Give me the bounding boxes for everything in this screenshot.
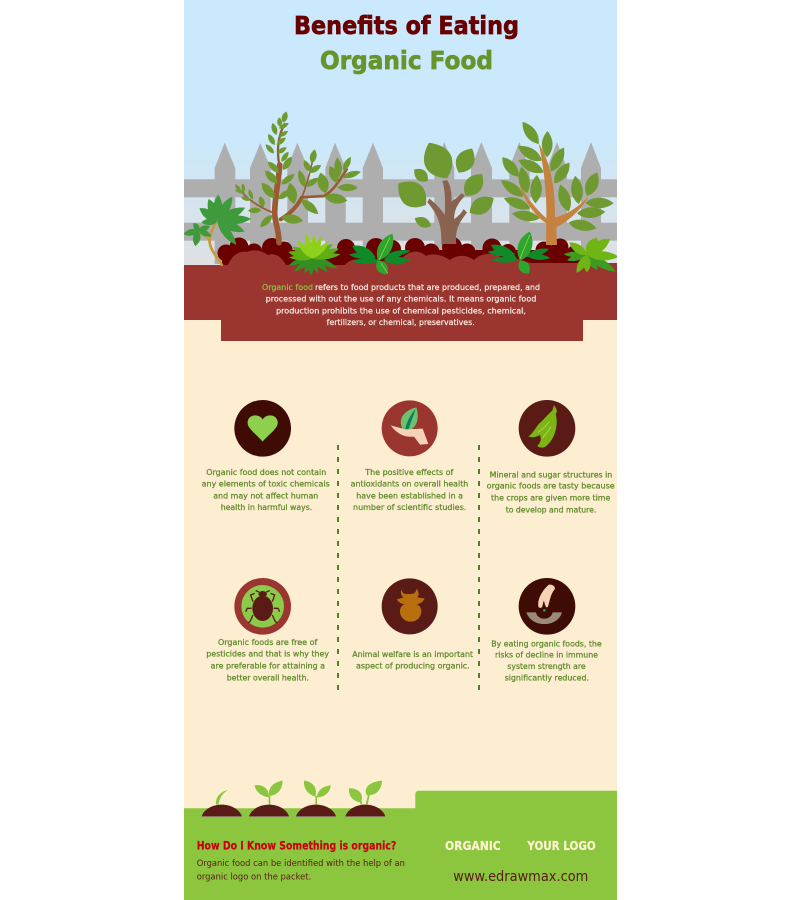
text: animal welfare: aspect of producing organic.: [356, 662, 470, 671]
text: toxic chemicals: health in harmful ways.: [221, 503, 312, 512]
text: antioxidants: number of scientific studies.: [353, 503, 466, 512]
palm plants at left: [183, 194, 252, 266]
text: pesticides: [206, 638, 329, 682]
text: immune system: By eating organic foods, the: [491, 639, 602, 648]
title: Organic Food: [320, 46, 493, 75]
fence: [184, 142, 617, 264]
text: animal welfare: [352, 650, 473, 671]
footer answer text: organic logo on the packet.: [197, 871, 311, 881]
fern plant: [564, 238, 617, 273]
intro paragraph: production prohibits the use of chemical pesticides, chemical,: [276, 306, 526, 315]
icon: hand planting seed: [519, 578, 575, 635]
icon: pea pod: [519, 400, 575, 457]
text: minerals and sugar: the crops are given more time: [491, 494, 610, 503]
intro paragraph: refers to food products that are produced, prepared, and: [315, 283, 540, 292]
icon: heart: [234, 400, 291, 457]
text: pesticides: are preferable for attaining a: [211, 662, 325, 671]
logo label: organic: ORGANIC: [445, 839, 501, 853]
title: Benefits of Eating: [294, 11, 519, 40]
dark soil mounds: [218, 238, 581, 265]
dashed dividers: [337, 445, 480, 690]
sky background: [184, 0, 617, 270]
text: pesticides: better overall health.: [227, 673, 309, 682]
intro paragraph: fertilizers, or chemical, preservatives.: [327, 318, 475, 327]
icon: hand holding leaf: [382, 400, 438, 456]
text: minerals and sugar: to develop and mature.: [506, 505, 596, 514]
text: toxic chemicals: Organic food does not contain: [206, 468, 326, 477]
red soil panel: [184, 250, 617, 341]
tree 2 with big leaves: [398, 142, 494, 244]
text: minerals and sugar: Mineral and sugar structures in: [490, 471, 612, 480]
tree 3 with orange trunk: [498, 119, 614, 245]
footer answer text: Organic food can be identified with the help of an: [197, 858, 405, 868]
grass bush: [287, 232, 341, 276]
footer question heading: How Do I Know Something is organic?: [197, 838, 396, 852]
text: toxic chemicals: any elements of toxic chemicals: [202, 480, 330, 489]
tree 1 with branching leaves: [234, 111, 362, 243]
title: [294, 11, 519, 75]
text: immune system: system strength are: [507, 662, 586, 671]
text: antioxidants: [351, 468, 468, 512]
text: antioxidants: antioxidants on overall health: [351, 480, 468, 489]
text: immune system: [491, 639, 602, 683]
intro paragraph: processed with out the use of any chemicals. It means organic food: [266, 294, 536, 304]
text: immune system: risks of decline in immune: [495, 650, 598, 659]
text: immune system: significantly reduced.: [505, 674, 589, 683]
cream background: [184, 320, 617, 820]
footer answer text: [197, 858, 405, 881]
text: antioxidants: have been established in a: [356, 492, 463, 500]
text: antioxidants: The positive effects of: [364, 468, 454, 477]
icon: bug: [234, 578, 291, 635]
seedlings: [202, 781, 385, 818]
broad-leaf plant 1: [349, 234, 406, 274]
intro paragraph: Organic food: [262, 283, 313, 292]
text: pesticides: Organic foods are free of: [218, 638, 318, 647]
text: toxic chemicals: and may not affect human: [213, 492, 318, 500]
broad-leaf plant 2: [387, 232, 550, 274]
text: animal welfare: Animal welfare is an important: [352, 650, 473, 659]
text: minerals and sugar: organic foods are tasty because: [487, 482, 615, 491]
text: pesticides: pesticides and that is why they: [206, 650, 329, 659]
logo label: your logo: YOUR LOGO: [526, 839, 596, 853]
icon: cow: [382, 578, 438, 634]
text: minerals and sugar: [487, 471, 615, 514]
intro paragraph: [262, 283, 540, 327]
text: toxic chemicals: [202, 468, 330, 512]
footer green panel: [184, 791, 617, 900]
website: www.edrawmax.com: [453, 869, 588, 885]
